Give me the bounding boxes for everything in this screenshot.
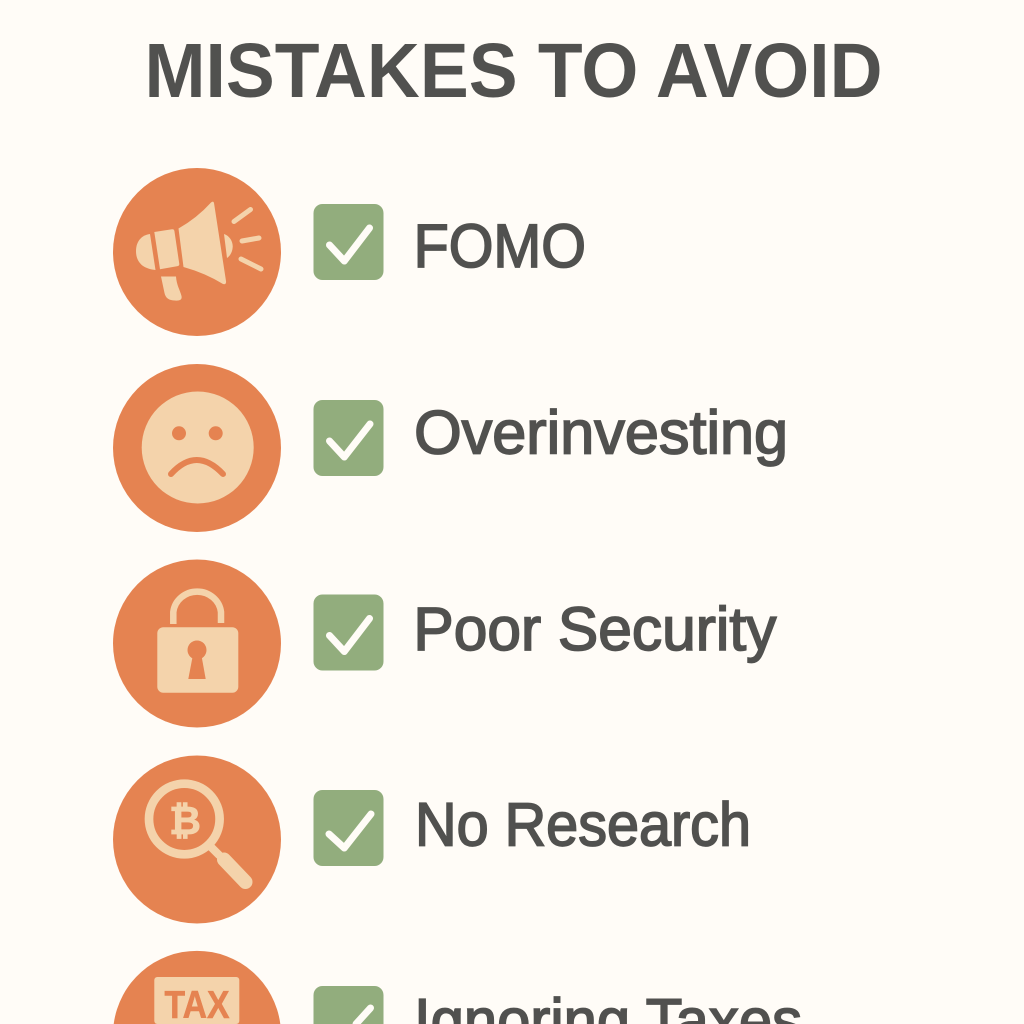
label: Overinvesting: Overinvesting (414, 398, 788, 466)
row: Poor Security (113, 560, 777, 728)
icon: padlock (113, 560, 281, 728)
icon: magnifier with bitcoin: ₿ (169, 799, 201, 844)
checkbox: No Research (314, 790, 384, 866)
checkbox: FOMO (314, 204, 384, 280)
title: MISTAKES TO AVOID (144, 28, 882, 114)
checkbox: Poor Security (314, 594, 384, 670)
label: Poor Security: Poor Security (413, 595, 777, 663)
icon: tax document (114, 951, 280, 1024)
row: FOMO (113, 168, 586, 336)
label: FOMO: FOMO (414, 212, 586, 280)
row: Overinvesting (113, 364, 788, 532)
row: Ignoring Taxes (114, 951, 802, 1024)
label: No Research: No Research (415, 791, 751, 859)
checkbox: Ignoring Taxes (314, 986, 384, 1024)
checkbox: Overinvesting (314, 400, 384, 476)
icon: sad face (113, 364, 281, 532)
row: No Research (113, 756, 751, 924)
icon: magnifier with bitcoin (113, 756, 281, 924)
icon: megaphone (113, 168, 281, 336)
